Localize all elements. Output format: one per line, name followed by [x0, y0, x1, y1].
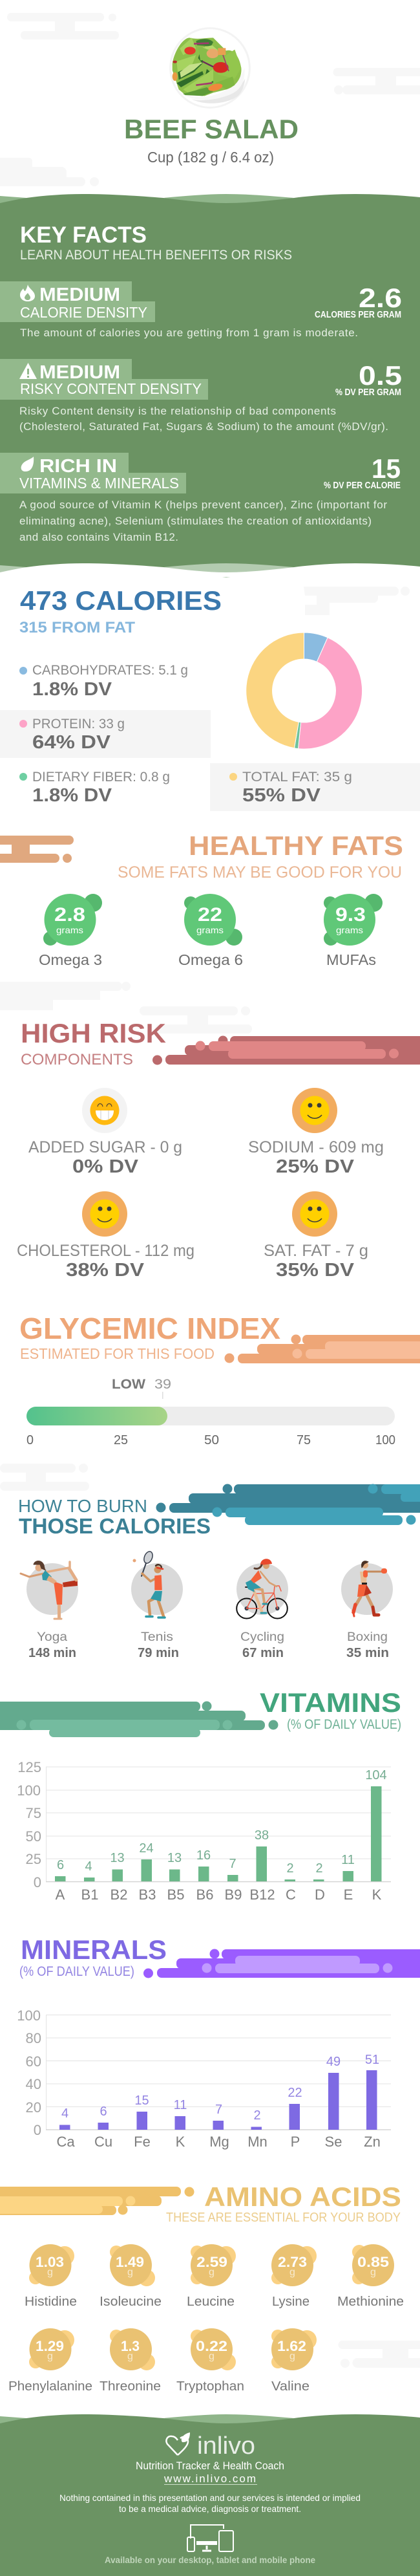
exercise: tennis: Tenis [141, 1630, 173, 1644]
bar chart: vitamins: D [315, 1887, 325, 1903]
amino: isoleucine: g [127, 2267, 133, 2278]
decoration: burn banner [156, 1484, 420, 1525]
amino: tryptophan: g [209, 2351, 215, 2362]
bar chart: vitamins: 13 [167, 1851, 182, 1865]
panel: glycemic index [19, 1312, 420, 1447]
subheading: SOME FATS MAY BE GOOD FOR YOU [118, 863, 402, 882]
amino: lysine: Lysine [272, 2295, 310, 2309]
badge: mufas [324, 894, 383, 968]
fact: calorie density: CALORIES PER GRAM [315, 310, 401, 320]
bar chart: minerals [17, 2008, 391, 2150]
disclaimer: Nothing contained in this presentation and our services is intended or implied [59, 2493, 361, 2503]
badge: omega 3: grams [56, 925, 83, 935]
amino: leucine [187, 2244, 236, 2309]
fact: calorie density: CALORIE DENSITY [20, 304, 147, 321]
badge: mufas: 9.3 [335, 904, 366, 925]
bar chart: vitamins: B12 [249, 1887, 275, 1903]
fact: rich in vitamins and minerals: A good source of Vitamin K (helps prevent cancer), Zinc (important for [19, 499, 387, 511]
risk: added sugar: ADDED SUGAR - 0 g [28, 1138, 182, 1156]
panel: key facts [0, 194, 420, 578]
bar chart: minerals: Mg [209, 2134, 229, 2150]
exercise: yoga: 148 min [28, 1646, 76, 1660]
fact: risky content density: MEDIUM [39, 362, 120, 383]
subheading: components: COMPONENTS [21, 1051, 133, 1068]
heading: those calories: THOSE CALORIES [19, 1514, 211, 1538]
bar chart: minerals: Mn [247, 2134, 268, 2150]
availability note: Available on your desktop, tablet and mobile phone [105, 2555, 315, 2565]
bar chart: minerals: 40 [26, 2076, 41, 2092]
bar chart: minerals: 0 [34, 2122, 41, 2138]
exercise: tennis [131, 1550, 183, 1660]
bar chart: vitamins: 24 [139, 1841, 154, 1856]
bar chart: minerals: 80 [26, 2030, 41, 2046]
decoration: high risk banner [152, 1036, 420, 1065]
bar chart: vitamins: B2 [110, 1887, 127, 1903]
legend: protein: 64% DV [32, 732, 111, 753]
subheading: LEARN ABOUT HEALTH BENEFITS OR RISKS [20, 248, 292, 263]
amino: methionine: Methionine [337, 2295, 404, 2309]
subheading: (% OF DAILY VALUE) [287, 1717, 401, 1732]
bar chart: vitamins: 6 [57, 1858, 64, 1872]
risk: saturated fat: SAT. FAT - 7 g [264, 1242, 368, 1260]
amino: isoleucine [100, 2244, 162, 2309]
bar chart: minerals: 20 [26, 2099, 41, 2116]
bar chart: minerals: Fe [134, 2134, 151, 2150]
bar chart: vitamins: 4 [85, 1859, 92, 1874]
amino: valine: 1.62 [277, 2338, 306, 2354]
risk: cholesterol: 38% DV [66, 1260, 145, 1281]
amino: methionine: g [370, 2267, 376, 2278]
amino: lysine: 2.73 [278, 2254, 307, 2270]
subheading: THESE ARE ESSENTIAL FOR YOUR BODY [166, 2211, 401, 2225]
bar chart: minerals: 49 [326, 2055, 341, 2069]
exercise: boxing: Boxing [347, 1630, 388, 1644]
donut chart [246, 633, 362, 749]
amino: threonine: g [127, 2351, 133, 2362]
amino: phenylalanine [8, 2328, 92, 2394]
decoration: amino banner [0, 2187, 194, 2215]
bar chart: vitamins: 50 [26, 1828, 41, 1845]
fact: risky content density: (Cholesterol, Saturated Fat, Sugars & Sodium) to the amount (%DV/gr). [19, 420, 388, 433]
bar chart: minerals: 11 [174, 2098, 187, 2112]
legend: total fat: 55% DV [242, 785, 321, 806]
panel: minerals [17, 1934, 420, 2150]
bar chart: vitamins: 104 [365, 1768, 387, 1782]
bar chart: vitamins: 25 [26, 1851, 41, 1867]
amino: histidine [25, 2244, 77, 2309]
amino: isoleucine: 1.49 [116, 2254, 144, 2270]
icon: flame [20, 285, 35, 301]
bar chart: vitamins: 38 [255, 1828, 269, 1843]
bar chart: minerals: 51 [365, 2053, 379, 2067]
risk: cholesterol [17, 1191, 194, 1281]
bar chart: vitamins: 13 [110, 1851, 125, 1865]
amino: lysine: g [289, 2267, 295, 2278]
subheading: (% OF DAILY VALUE) [19, 1964, 134, 1979]
figure: yoga [21, 1561, 78, 1619]
decoration: minerals banner [143, 1949, 420, 1978]
bar chart: vitamins: 7 [229, 1857, 236, 1871]
amino: tryptophan: Tryptophan [176, 2379, 244, 2394]
bar chart: minerals: 4 [61, 2106, 68, 2121]
badge: omega 6: 22 [198, 904, 222, 925]
amino: phenylalanine: g [47, 2351, 53, 2362]
amino: histidine: g [47, 2267, 53, 2278]
bar chart: vitamins: C [286, 1887, 296, 1903]
icon: warning triangle [19, 363, 37, 379]
gauge axis: 50 [204, 1433, 219, 1447]
decoration: fats banner [0, 836, 74, 863]
figure: cycling [236, 1559, 288, 1618]
bar chart: vitamins: 2 [315, 1861, 323, 1876]
fact: risky content density: 0.5 [359, 360, 402, 391]
amino: threonine: Threonine [100, 2379, 161, 2394]
logo: inlivo [166, 2432, 255, 2460]
bar chart: vitamins: B6 [196, 1887, 213, 1903]
fact: rich in vitamins and minerals: RICH IN [39, 456, 117, 477]
bar chart: minerals: Se [325, 2134, 342, 2150]
bar chart: minerals: Cu [94, 2134, 112, 2150]
amino: leucine: Leucine [187, 2295, 235, 2309]
badge: mufas: MUFAs [326, 951, 376, 968]
exercise: cycling: 67 min [242, 1646, 284, 1660]
serving size: Cup (182 g / 6.4 oz) [147, 149, 274, 166]
gauge axis: 100 [375, 1433, 395, 1447]
bar chart: vitamins: B1 [81, 1887, 98, 1903]
risk: sodium: SODIUM - 609 mg [248, 1138, 384, 1156]
decoration: glycemic banner [225, 1335, 420, 1363]
risk: sodium: 25% DV [276, 1156, 355, 1177]
legend: dietary fiber: 1.8% DV [32, 785, 112, 806]
disclaimer [59, 2493, 361, 2514]
exercise: yoga [21, 1561, 78, 1660]
panel: high risk components [17, 1018, 420, 1281]
bar chart: vitamins: 75 [26, 1805, 41, 1821]
gauge axis: 25 [114, 1433, 128, 1447]
fact: rich in vitamins and minerals: % DV PER CALORIE [324, 481, 401, 491]
bar chart: minerals: P [291, 2134, 300, 2150]
fact: rich in vitamins and minerals [0, 453, 401, 543]
exercise: boxing: 35 min [346, 1646, 389, 1660]
legend: dietary fiber [19, 770, 170, 806]
icon: salad plate [171, 28, 249, 107]
risk: saturated fat [264, 1191, 368, 1281]
bar chart: vitamins: K [372, 1887, 382, 1903]
fact: rich in vitamins and minerals: and also contains Vitamin B12. [19, 531, 178, 543]
badge: omega 3: Omega 3 [39, 951, 102, 968]
legend: protein: PROTEIN: 33 g [32, 717, 125, 731]
fact: calorie density: The amount of calories you are getting from 1 gram is moderate. [20, 327, 358, 339]
heading: how to burn: HOW TO BURN [18, 1496, 147, 1516]
bar chart: vitamins: B9 [225, 1887, 242, 1903]
fact: risky content density: % DV PER GRAM [335, 387, 401, 398]
legend: carbohydrates [19, 663, 188, 700]
gauge axis [26, 1433, 395, 1447]
heading: amino acids: AMINO ACIDS [204, 2181, 401, 2212]
heading: minerals: MINERALS [21, 1934, 167, 1965]
gauge label [112, 1377, 171, 1399]
figure: tennis [133, 1550, 165, 1618]
legend: total fat: TOTAL FAT: 35 g [242, 770, 352, 785]
amino: tryptophan [176, 2328, 244, 2394]
bar chart: vitamins: A [56, 1887, 65, 1903]
amino: threonine: 1.3 [121, 2338, 140, 2354]
bar chart: vitamins: E [344, 1887, 353, 1903]
legend: carbohydrates: CARBOHYDRATES: 5.1 g [32, 663, 188, 678]
badge: mufas: grams [336, 925, 363, 935]
legend: dietary fiber: DIETARY FIBER: 0.8 g [32, 770, 170, 785]
fact: risky content density: RISKY CONTENT DENSITY [20, 380, 202, 397]
gauge axis: 75 [297, 1433, 311, 1447]
bar chart: minerals: Zn [364, 2134, 381, 2150]
bar chart: minerals: 15 [134, 2094, 149, 2108]
panel: calories [0, 585, 420, 811]
panel: how to burn calories [18, 1484, 420, 1660]
amino: lysine [271, 2244, 317, 2309]
gauge axis: 0 [26, 1433, 34, 1447]
title: BEEF SALAD [124, 114, 299, 144]
risk: saturated fat: 35% DV [276, 1260, 355, 1281]
panel: healthy fats [0, 830, 403, 968]
subheading: from fat: 315 FROM FAT [19, 619, 135, 636]
amino: methionine: 0.85 [357, 2254, 389, 2270]
risk: added sugar: 0% DV [72, 1156, 139, 1177]
fact: calorie density [0, 281, 402, 339]
decoration: vitamins banner [0, 1701, 278, 1737]
badge: omega 6: grams [196, 925, 224, 935]
legend: carbohydrates: 1.8% DV [32, 679, 112, 700]
icon: leaf [21, 457, 34, 471]
fact: calorie density: 2.6 [359, 283, 402, 313]
bar chart: vitamins: B5 [167, 1887, 184, 1903]
figure: boxing [353, 1561, 387, 1616]
amino: phenylalanine: Phenylalanine [8, 2379, 92, 2394]
badge: omega 6: Omega 6 [178, 951, 243, 968]
bar chart: minerals: 2 [253, 2108, 261, 2123]
bar chart: vitamins: 100 [17, 1782, 41, 1799]
heading: glycemic index: GLYCEMIC INDEX [19, 1312, 280, 1345]
disclaimer: to be a medical advice, diagnosis or treatment. [119, 2504, 301, 2514]
bar chart: vitamins [17, 1759, 391, 1903]
amino: methionine [337, 2244, 404, 2309]
amino: isoleucine: Isoleucine [100, 2295, 162, 2309]
fact: rich in vitamins and minerals: eliminating acne), Selenium (stimulates the creation of antioxidants) [19, 515, 372, 527]
risk: sodium [248, 1088, 384, 1177]
bar chart: minerals: K [176, 2134, 185, 2150]
bar chart: minerals: 100 [17, 2008, 41, 2024]
subheading: ESTIMATED FOR THIS FOOD [20, 1345, 215, 1362]
exercise: tennis: 79 min [138, 1646, 179, 1660]
amino: tryptophan: 0.22 [196, 2338, 227, 2354]
bar chart: minerals: 22 [288, 2086, 302, 2100]
bar chart: vitamins: 0 [34, 1874, 41, 1890]
amino: valine: Valine [271, 2379, 310, 2394]
amino: leucine: 2.59 [196, 2254, 227, 2270]
panel: footer [0, 2414, 420, 2576]
amino: leucine: g [209, 2267, 215, 2278]
badge: omega 3: 2.8 [54, 904, 85, 925]
tagline: Nutrition Tracker & Health Coach [136, 2460, 284, 2472]
heading: healthy fats: HEALTHY FATS [189, 830, 403, 861]
icon: devices [187, 2525, 233, 2551]
website: www.inlivo.com [163, 2473, 256, 2485]
panel: vitamins [0, 1687, 401, 1903]
heading: calories: 473 CALORIES [20, 585, 222, 616]
gauge label: LOW [112, 1377, 145, 1392]
bar chart: vitamins: B3 [139, 1887, 156, 1903]
gauge label: 39 [154, 1377, 171, 1392]
bar chart: vitamins: 11 [341, 1853, 355, 1867]
exercise: yoga: Yoga [37, 1630, 67, 1644]
heading: key facts: KEY FACTS [20, 222, 147, 248]
badge: omega 6 [178, 894, 243, 968]
fact: calorie density: MEDIUM [39, 285, 120, 305]
bar chart: minerals: 60 [26, 2053, 41, 2070]
badge: omega 3 [39, 894, 102, 968]
exercise: cycling [236, 1559, 288, 1660]
amino: valine [271, 2328, 317, 2394]
fact: risky content density [0, 359, 402, 433]
amino: threonine [100, 2328, 161, 2394]
risk: added sugar [28, 1088, 182, 1177]
amino: histidine: 1.03 [36, 2254, 64, 2270]
risk: cholesterol: CHOLESTEROL - 112 mg [17, 1242, 194, 1260]
exercise: cycling: Cycling [240, 1630, 284, 1644]
bar chart: minerals: 6 [100, 2105, 107, 2119]
legend: protein [0, 710, 211, 758]
bar chart: vitamins: 125 [17, 1759, 41, 1775]
amino: histidine: Histidine [25, 2295, 77, 2309]
panel: amino acids [0, 2181, 404, 2394]
amino: valine: g [289, 2351, 295, 2362]
bar chart: vitamins: 2 [286, 1861, 294, 1876]
bottom wave [0, 563, 420, 578]
gauge bar [26, 1407, 395, 1425]
bar chart: vitamins: 16 [196, 1848, 211, 1863]
bar chart: minerals: Ca [56, 2134, 75, 2150]
amino: phenylalanine: 1.29 [36, 2338, 64, 2354]
legend: total fat [210, 763, 420, 811]
fact: rich in vitamins and minerals: VITAMINS & MINERALS [19, 475, 179, 492]
fact: rich in vitamins and minerals: 15 [372, 453, 401, 484]
fact: risky content density: Risky Content density is the relationship of bad components [19, 405, 336, 417]
heading: vitamins: VITAMINS [260, 1687, 401, 1718]
exercise: boxing [341, 1561, 393, 1660]
bar chart: minerals: 7 [215, 2103, 222, 2117]
logo: inlivo: inlivo [197, 2432, 255, 2460]
heading: high risk: HIGH RISK [21, 1018, 166, 1048]
